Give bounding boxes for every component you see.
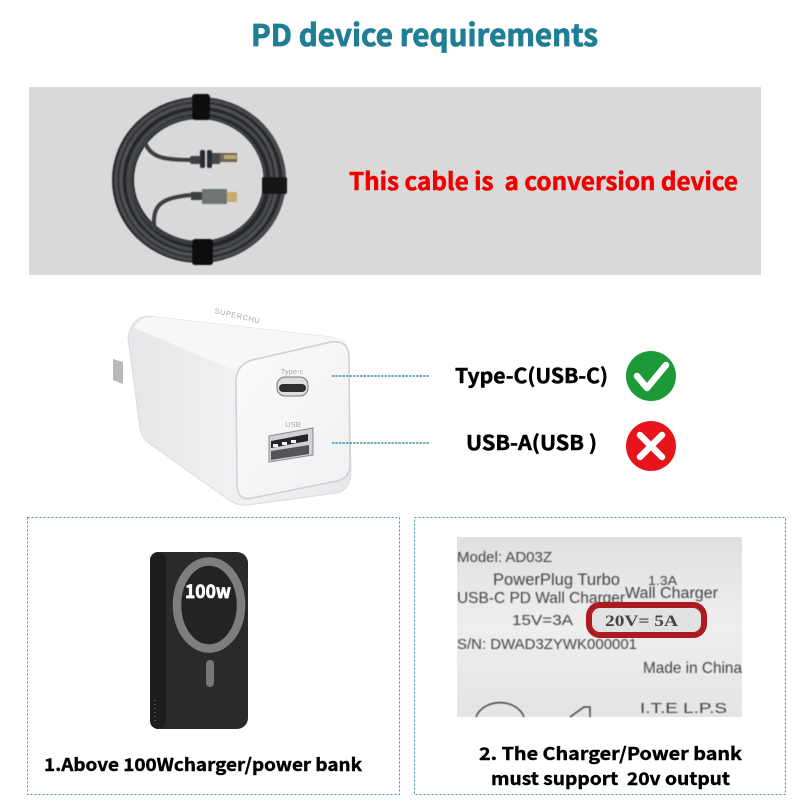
charger top face (134, 317, 348, 370)
charger specification photo: 15V=3A (512, 612, 573, 629)
charger specification photo: 1.3A (648, 573, 677, 588)
callout text: This cable is a conversion device (349, 162, 738, 197)
charger specification photo: Made in China (643, 660, 742, 677)
icon: power bank (150, 552, 248, 729)
title: PD device requirements (251, 11, 598, 55)
icon: coiled cable (116, 94, 287, 265)
icon: wall charger (113, 306, 351, 505)
panel: conversion cable (29, 87, 761, 275)
highlighted rating: 20V= 5A (605, 613, 679, 630)
type-c port (277, 377, 308, 396)
caption: power bank: 1.Above 100Wcharger/power bank (44, 752, 362, 777)
charger front face (236, 342, 350, 498)
power rating: 100w (185, 577, 231, 604)
charger body (128, 316, 351, 505)
panel: voltage label (414, 518, 786, 794)
connector line: type-c (332, 375, 430, 377)
label: usb-a: USB-A(USB ) (466, 427, 597, 456)
charger specification photo: USB-C PD Wall Charger (457, 590, 625, 607)
charger specification photo: Model: AD03Z (457, 549, 552, 566)
charger specification photo (457, 537, 742, 717)
icon: green check (626, 351, 676, 401)
charger specification photo: PowerPlug Turbo (493, 571, 620, 589)
charger specification photo: S/N: DWAD3ZYWK000001 (457, 636, 637, 653)
caption: voltage: must support 20v output (491, 766, 731, 791)
charger prong (113, 359, 123, 384)
highlighted rating (589, 605, 704, 635)
usb-a port (269, 428, 313, 462)
label: type-c: Type-C(USB-C) (455, 360, 608, 389)
charger specification photo: Wall Charger (625, 585, 718, 602)
usb port label: USB (285, 420, 301, 429)
charger brand: SUPERCHU (214, 306, 261, 325)
type-c port label: Type-c (281, 367, 303, 376)
connector line: usb-a (332, 442, 430, 444)
charger specification photo: I.T.E L.P.S (640, 701, 727, 717)
panel: power bank (28, 518, 400, 794)
icon: red cross (626, 421, 676, 471)
caption: voltage: 2. The Charger/Power bank (479, 741, 742, 766)
